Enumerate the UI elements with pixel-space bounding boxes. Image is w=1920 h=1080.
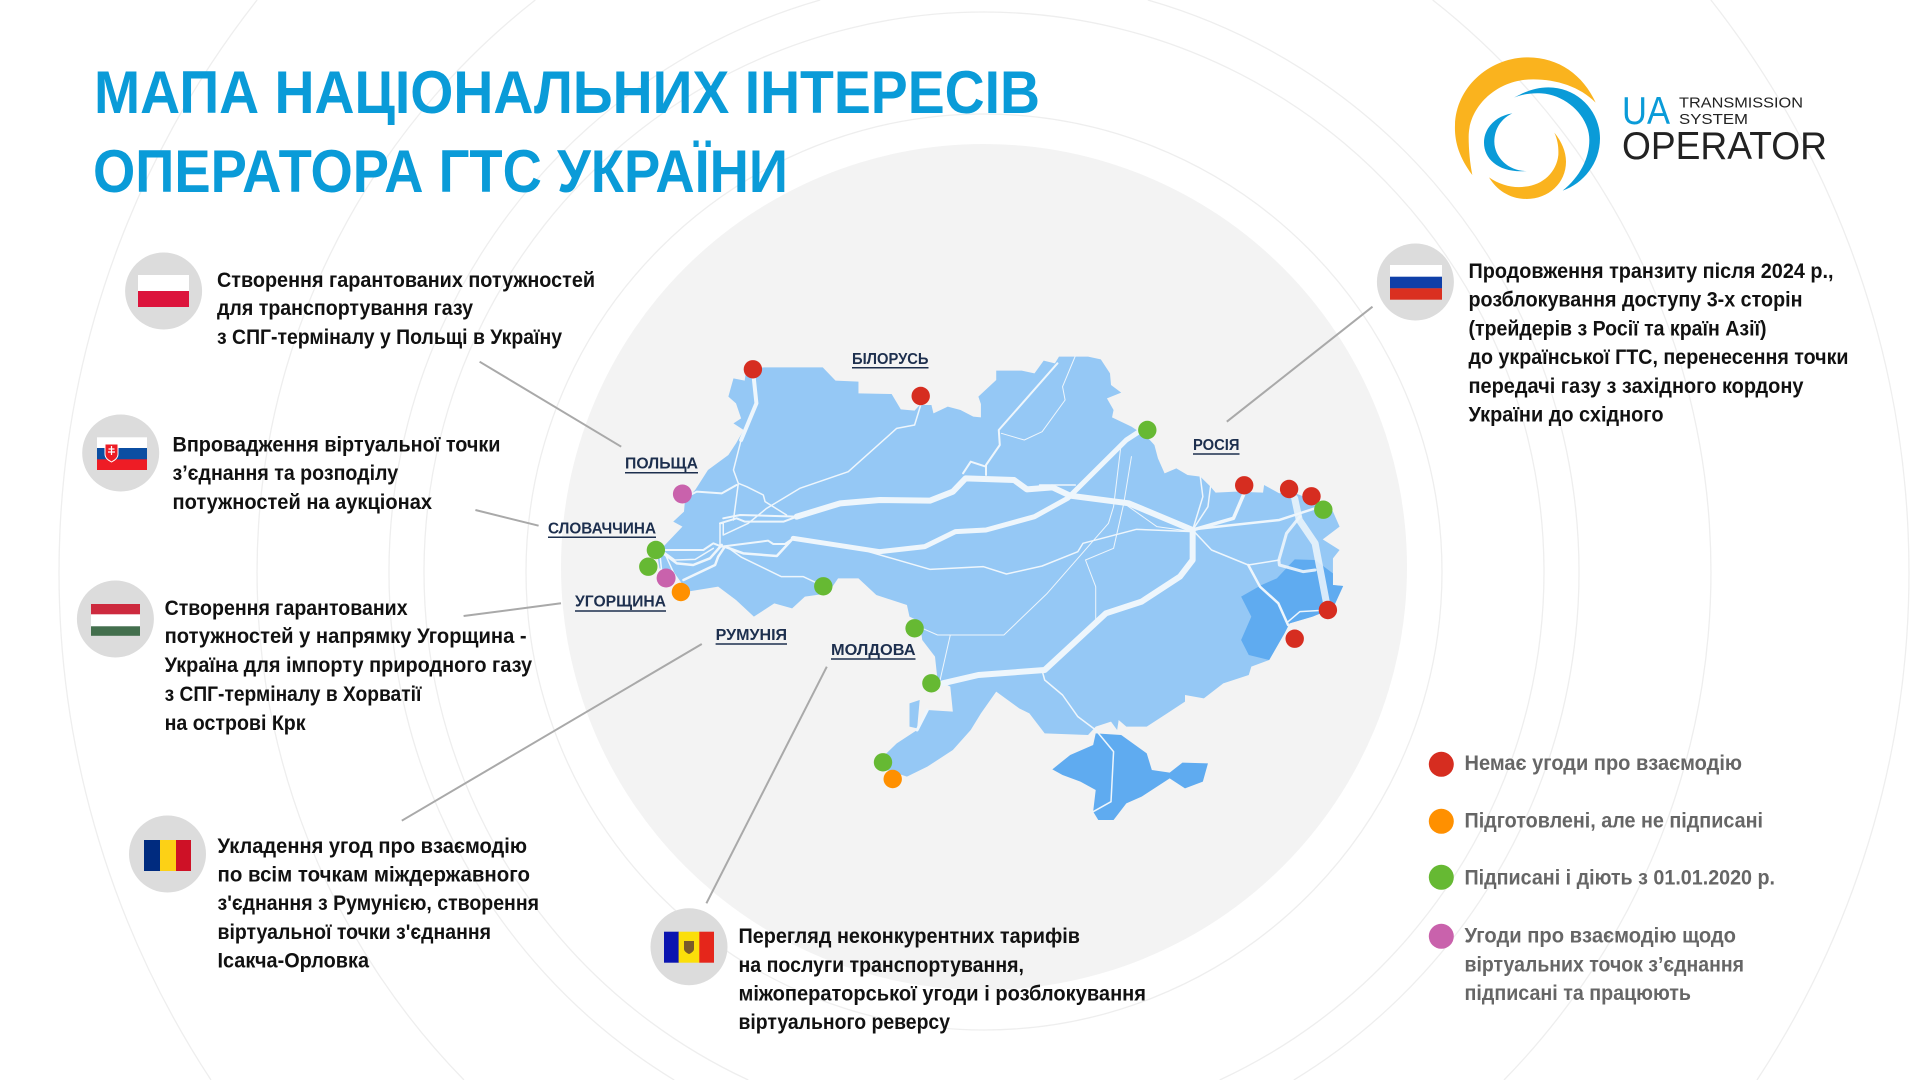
- text: Moldova: віртуального реверсу: [738, 1011, 950, 1034]
- text: Slovakia: з’єднання та розподілу: [172, 462, 398, 485]
- panel: Russia: [1377, 244, 1848, 427]
- icon: Moldova flag: [650, 908, 728, 985]
- country label: Slovakia: СЛОВАЧЧИНА: [548, 520, 656, 537]
- text: Russia: передачі газу з західного кордону: [1468, 375, 1804, 398]
- logo: UA Transmission System Operator: [1455, 57, 1827, 199]
- text: Russia: Продовження транзиту після 2024 р.,: [1468, 260, 1834, 283]
- legend item: virtual interconnection agreements: віртуальних точок з’єднання: [1464, 954, 1744, 977]
- occupied Donbas area: [1241, 559, 1343, 660]
- text: Poland: з СПГ-терміналу у Польщі в Україну: [217, 326, 562, 349]
- map of Ukraine: [657, 356, 1343, 820]
- country label: Romania: РУМУНІЯ: [716, 627, 787, 644]
- text: Russia: розблокування доступу 3-х сторін: [1468, 288, 1802, 312]
- icon: Slovakia flag: [82, 414, 159, 492]
- panel: Slovakia: [82, 414, 500, 514]
- text: Hungary: Україна для імпорту природного газу: [165, 654, 532, 677]
- text: Slovakia: потужностей на аукціонах: [172, 491, 432, 514]
- map points: no agreement: [744, 360, 1337, 648]
- text: Moldova: Перегляд неконкурентних тарифів: [738, 925, 1080, 948]
- leader line: Hungary: [464, 603, 561, 616]
- country label: Belarus: БІЛОРУСЬ: [852, 351, 928, 368]
- panel: Romania: [129, 816, 539, 973]
- text: Poland: для транспортування газу: [217, 297, 473, 320]
- logo: UA Transmission System Operator: UA: [1622, 90, 1670, 133]
- logo: UA Transmission System Operator: TRANSMISSION: [1679, 94, 1803, 112]
- legend item: signed and in force: Підписані і діють з 01.01.2020 р.: [1464, 866, 1775, 889]
- leader line: Russia: [1227, 307, 1372, 422]
- leader line: Poland: [480, 362, 621, 447]
- text: Russia: до української ГТС, перенесення точки: [1468, 346, 1848, 369]
- title: ОПЕРАТОРА ГТС УКРАЇНИ: [93, 138, 788, 205]
- text: Slovakia: Впровадження віртуальної точки: [172, 434, 500, 457]
- text: Russia: [1468, 260, 1848, 427]
- text: Romania: віртуальної точки з'єднання: [218, 921, 491, 944]
- legend item: virtual interconnection agreements: Угоди про взаємодію щодо: [1464, 925, 1736, 948]
- panel: Hungary: [77, 580, 532, 735]
- text: Poland: Створення гарантованих потужностей: [217, 269, 595, 292]
- logo: UA Transmission System Operator: SYSTEM: [1679, 111, 1748, 128]
- text: Moldova: на послуги транспортування,: [738, 954, 1024, 977]
- country label: Moldova: МОЛДОВА: [831, 642, 916, 659]
- map points: prepared not signed: [672, 583, 902, 788]
- text: Russia: (трейдерів з Росії та країн Азії): [1468, 318, 1766, 340]
- panel: Moldova: [650, 908, 1146, 1034]
- text: Romania: Укладення угод про взаємодію: [218, 835, 527, 858]
- text: Romania: з'єднання з Румунією, створення: [218, 892, 539, 915]
- leader line: Slovakia: [475, 510, 539, 526]
- icon: Russia flag: [1377, 244, 1454, 320]
- leader line: Moldova: [706, 667, 827, 903]
- text: Hungary: на острові Крк: [165, 712, 306, 735]
- map points: virtual interconnection agreements: [657, 484, 692, 588]
- text: Romania: Ісакча-Орловка: [218, 950, 369, 973]
- country label: Poland: ПОЛЬЩА: [625, 456, 698, 473]
- text: Poland: [217, 269, 595, 349]
- text: Hungary: з СПГ-терміналу в Хорватії: [165, 683, 422, 706]
- legend: [1429, 752, 1775, 1005]
- legend item: virtual interconnection agreements: підписані та працюють: [1464, 982, 1691, 1005]
- text: Hungary: [165, 597, 532, 735]
- title: [93, 59, 1040, 205]
- logo: UA Transmission System Operator: OPERATOR: [1622, 125, 1827, 168]
- Danube delta islet: [909, 700, 920, 728]
- text: Hungary: потужностей у напрямку Угорщина -: [165, 625, 527, 648]
- Crimea: [1052, 733, 1208, 820]
- panel: Poland: [125, 252, 595, 349]
- legend item: virtual interconnection agreements: [1429, 924, 1744, 1005]
- text: Moldova: [738, 925, 1146, 1034]
- text: Slovakia: [172, 434, 500, 514]
- leader line: Romania: [402, 644, 702, 821]
- country label: Hungary: УГОРЩИНА: [575, 594, 666, 611]
- pipelines: [660, 356, 1328, 812]
- legend item: prepared not signed: Підготовлені, але не підписані: [1464, 809, 1763, 832]
- text: Romania: по всім точкам міждержавного: [218, 864, 530, 887]
- map points: signed and in force: [639, 421, 1333, 772]
- text: Russia: України до східного: [1468, 404, 1664, 427]
- icon: Romania flag: [129, 816, 206, 892]
- text: Romania: [218, 835, 539, 973]
- country label: Russia: РОСІЯ: [1193, 437, 1240, 454]
- legend item: no agreement: Немає угоди про взаємодію: [1464, 752, 1742, 775]
- icon: Hungary flag: [77, 580, 154, 658]
- background disc: [561, 144, 1407, 990]
- text: Moldova: міжоператорської угоди і розблокування: [738, 983, 1146, 1006]
- icon: Poland flag: [125, 252, 202, 330]
- mainland territory: [657, 357, 1343, 777]
- title: МАПА НАЦІОНАЛЬНИХ ІНТЕРЕСІВ: [94, 59, 1040, 126]
- text: Hungary: Створення гарантованих: [165, 597, 408, 620]
